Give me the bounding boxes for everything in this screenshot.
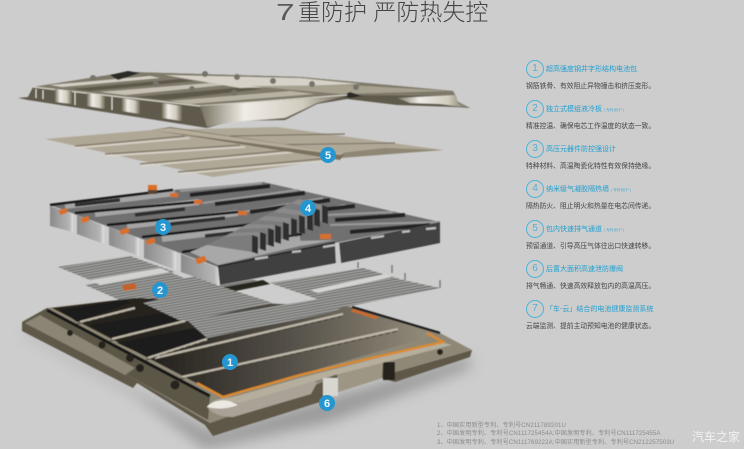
- feature 1: 钢筋铁骨、有效阻止异物撞击和挤压变形。: [526, 82, 655, 90]
- aerogel fins: [322, 205, 328, 224]
- internal plates: [143, 285, 273, 322]
- lid edge highlight: [33, 87, 347, 106]
- feature 3: 3: [532, 143, 538, 154]
- feature 2: 独立式模组液冷板 ( 专利设计¹ ): [546, 106, 624, 112]
- feature 6: [526, 260, 655, 290]
- patent footnotes: 1、中国实用新型专利、专利号CN211789201U: [437, 422, 566, 429]
- feature 2: 精准控温、确保电芯工作温度的状态一致。: [526, 122, 655, 130]
- lid top surface: [33, 72, 456, 106]
- badge 4: [300, 200, 316, 216]
- compartments: [60, 300, 130, 322]
- lid side bulges: [55, 89, 72, 104]
- upper lid: [18, 71, 470, 128]
- exhaust channel plate: [45, 127, 443, 177]
- feature 1: [526, 60, 655, 90]
- frame details: [67, 330, 443, 390]
- cooling plates right: [270, 262, 440, 307]
- feature 2: [526, 100, 655, 130]
- badge 5: [320, 147, 336, 163]
- interior floor: [52, 298, 435, 397]
- feature 4: 隔热防火、阻止明火和热量在电芯间传递。: [526, 202, 655, 210]
- badge 1: 1: [227, 357, 233, 369]
- feature 2: 2: [532, 103, 538, 114]
- badge 3: [155, 219, 171, 235]
- feature 4: 4: [532, 183, 538, 194]
- left frame band: [22, 308, 210, 420]
- exploded artwork: [18, 71, 472, 436]
- feature 6: 后置大面积高速泄防爆阀: [546, 266, 623, 272]
- feature 5: 包内快速排气通道 ( 专利设计³ ): [546, 226, 624, 232]
- cooling plates left: [58, 256, 270, 305]
- badge 6: [319, 395, 335, 411]
- feature 5: 预留通道、引导高压气体往出口快速转移。: [526, 242, 655, 250]
- lid bolts: [90, 71, 359, 96]
- feature 3: [526, 140, 655, 170]
- feature 7: 云端监测、提前主动预知电池的健康状态。: [526, 322, 655, 330]
- tray top surface: [22, 298, 472, 423]
- badge 3: 3: [160, 222, 166, 234]
- rails: [80, 308, 398, 377]
- feature 3: 特种材料、高温陶瓷化特性有效保持绝缘。: [526, 162, 655, 170]
- badge 5: 5: [325, 150, 331, 162]
- silver front recess: [207, 380, 317, 417]
- feature 1: 1: [532, 63, 538, 74]
- feature 6: 排气畅通、快速高效释放包内的高温高压。: [526, 282, 655, 290]
- feature 7: 7: [532, 303, 538, 314]
- patent footnotes: [437, 422, 674, 446]
- left module stripes: [65, 193, 300, 254]
- feature 3: 高压元器件防控强设计: [546, 146, 616, 152]
- black side rails: [47, 310, 210, 396]
- badge 6: 6: [324, 398, 330, 410]
- patent footnotes: 2、中国发明专利、专利号CN111725454A;中国发明专利、专利号CN111725455A: [437, 430, 661, 437]
- feature 4: [526, 180, 655, 210]
- tray outer wall: [22, 322, 472, 436]
- patent footnotes: 3、中国发明专利、专利号CN111769222A;中国实用新型专利、专利号CN212257503U: [437, 439, 674, 446]
- watermark: 汽车之家: [692, 430, 740, 444]
- orange wiring: [197, 333, 443, 397]
- feature 6: 6: [532, 263, 538, 274]
- light band under wire: [223, 342, 452, 403]
- battery modules: [50, 182, 440, 286]
- tray: [22, 282, 472, 436]
- right module stripes: [180, 183, 440, 225]
- badge 1: [222, 354, 238, 370]
- wall panel: [337, 362, 383, 392]
- badge 4: 4: [305, 203, 312, 215]
- feature 1: 超高强度钢井字形结构电池包: [546, 66, 637, 72]
- module top surface: [50, 182, 440, 267]
- orange connectors: [59, 185, 331, 265]
- module silver faces: [50, 206, 73, 232]
- feature 7: 「车-云」结合的电池健康监测系统: [546, 306, 653, 312]
- module terminals: [255, 228, 436, 259]
- vent: [323, 378, 338, 396]
- feature 5: 5: [532, 223, 538, 234]
- feature 5: [526, 220, 655, 250]
- module dark sides: [218, 243, 336, 285]
- feature 7: [526, 300, 655, 330]
- tray shadow: [22, 330, 470, 449]
- feature 4: 纳米级气凝胶隔热墙 ( 专利设计² ): [546, 186, 631, 192]
- badge 2: [152, 282, 168, 298]
- badge 2: 2: [157, 285, 163, 297]
